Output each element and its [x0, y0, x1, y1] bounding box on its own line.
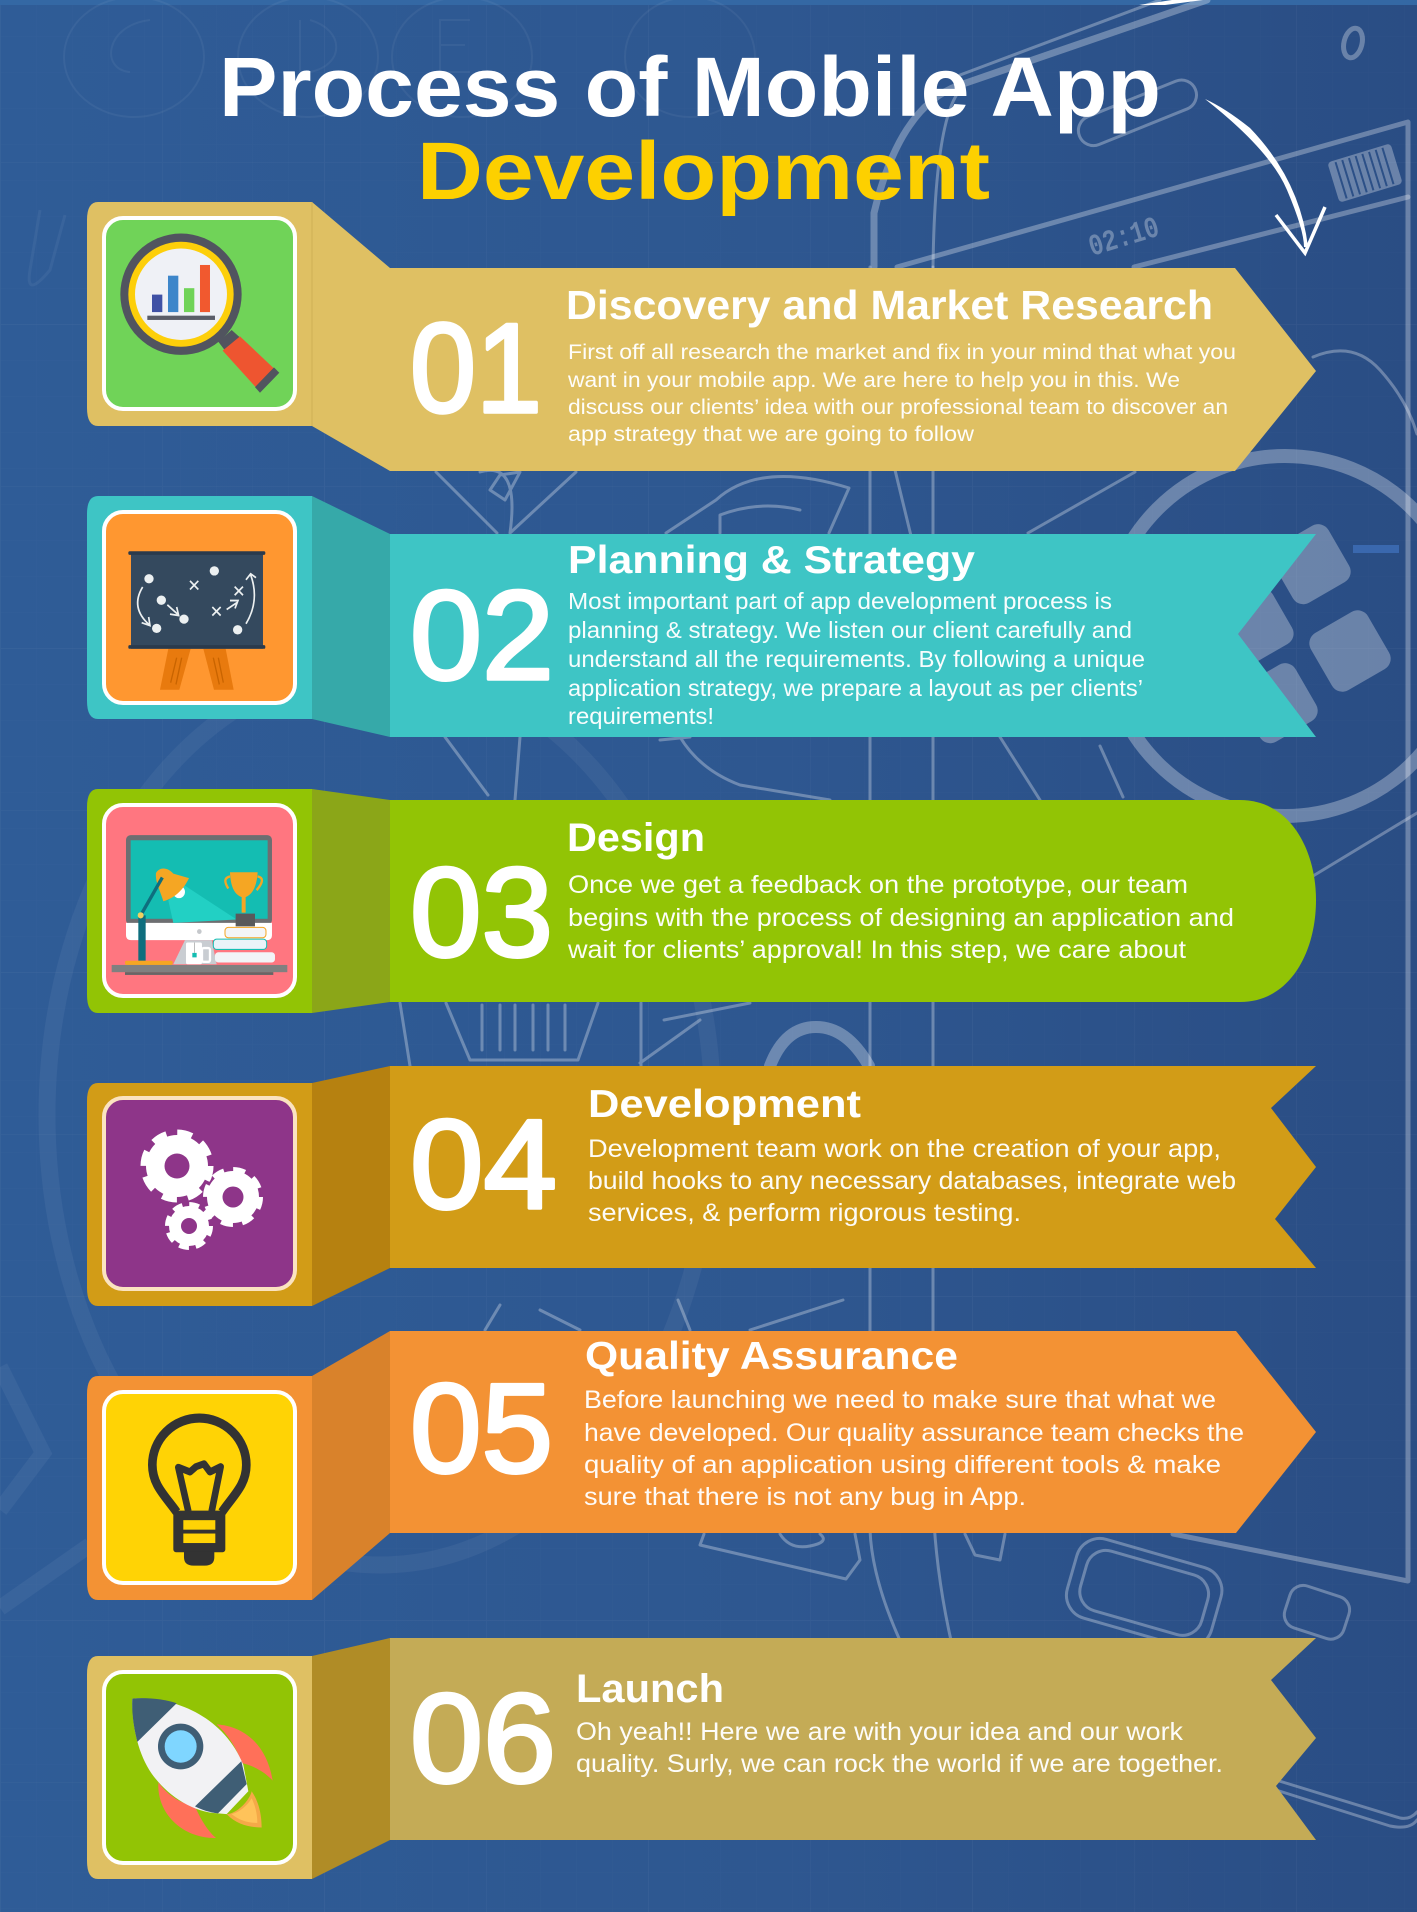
body 02	[568, 588, 1145, 729]
body 03	[567, 871, 1234, 964]
heading 03: Design	[567, 816, 705, 860]
body 01	[567, 340, 1236, 446]
ribbon 03	[87, 789, 312, 1013]
background blueprint: 02:10	[1085, 212, 1164, 266]
number 04: 04	[410, 1093, 557, 1235]
body 06: quality. Surly, we can rock the world if we are together.	[576, 1750, 1223, 1778]
ribbon 05	[87, 1376, 312, 1600]
title: Process of Mobile App	[219, 40, 1161, 134]
icon: designer desk	[104, 805, 295, 996]
body 06: Oh yeah!! Here we are with your idea and our work	[576, 1718, 1184, 1746]
heading 02: Planning & Strategy	[568, 539, 975, 582]
panel: step 01	[87, 202, 1316, 471]
icon: rocket	[104, 1672, 295, 1863]
panel: step 02	[87, 496, 1316, 737]
panel: step 04	[87, 1066, 1316, 1306]
ribbon 01	[87, 202, 1316, 471]
heading 04: Development	[588, 1083, 861, 1126]
body 02: Most important part of app development process is	[568, 588, 1112, 614]
body 05: have developed. Our quality assurance team checks the	[584, 1419, 1244, 1447]
heading 01: Discovery and Market Research	[566, 282, 1213, 328]
panel: step 06	[87, 1638, 1316, 1879]
body 02: requirements!	[568, 703, 714, 729]
body 01: want in your mobile app. We are here to help you in this. We	[567, 368, 1180, 392]
number 05: 05	[410, 1357, 553, 1499]
body 05	[584, 1386, 1244, 1511]
body 04	[588, 1135, 1236, 1227]
body 01: First off all research the market and fix in your mind that what you	[568, 340, 1236, 364]
body 05: sure that there is not any bug in App.	[584, 1483, 1026, 1511]
ribbon 04	[87, 1083, 312, 1306]
number 02: 02	[410, 564, 554, 706]
number 03: 03	[410, 841, 553, 983]
number 01: 01	[410, 297, 542, 439]
body 04: Development team work on the creation of your app,	[588, 1135, 1221, 1163]
icon: magnifying glass with chart	[104, 218, 295, 409]
body 05: quality of an application using different tools & make	[584, 1451, 1221, 1479]
icon: gears	[104, 1098, 295, 1289]
heading 06: Launch	[576, 1667, 724, 1711]
body 02: application strategy, we prepare a layout as per clients’	[568, 675, 1143, 701]
title	[219, 40, 1161, 217]
panel: step 03	[87, 789, 1316, 1013]
ribbon 06	[87, 1656, 312, 1879]
body 06	[576, 1718, 1223, 1778]
number 06: 06	[410, 1667, 556, 1809]
body 04: build hooks to any necessary databases, integrate web	[588, 1167, 1236, 1195]
body 04: services, & perform rigorous testing.	[588, 1199, 1021, 1227]
arrow: hand-drawn pointer	[1205, 99, 1325, 253]
heading 05: Quality Assurance	[585, 1335, 958, 1378]
body 03: begins with the process of designing an application and	[568, 904, 1234, 932]
ribbon 02	[87, 496, 312, 719]
body 01: app strategy that we are going to follow	[568, 422, 975, 446]
body 01: discuss our clients’ idea with our professional team to discover an	[568, 395, 1228, 419]
body 02: planning & strategy. We listen our client carefully and	[568, 617, 1132, 643]
panel: step 05	[87, 1331, 1316, 1600]
title: Development	[417, 126, 990, 217]
body 05: Before launching we need to make sure that what we	[584, 1386, 1216, 1414]
body 03: wait for clients’ approval! In this step, we care about	[567, 936, 1186, 964]
body 02: understand all the requirements. By following a unique	[568, 646, 1145, 672]
icon: strategy chalkboard	[104, 512, 295, 703]
body 03: Once we get a feedback on the prototype, our team	[568, 871, 1188, 899]
icon: light bulb	[104, 1392, 295, 1583]
